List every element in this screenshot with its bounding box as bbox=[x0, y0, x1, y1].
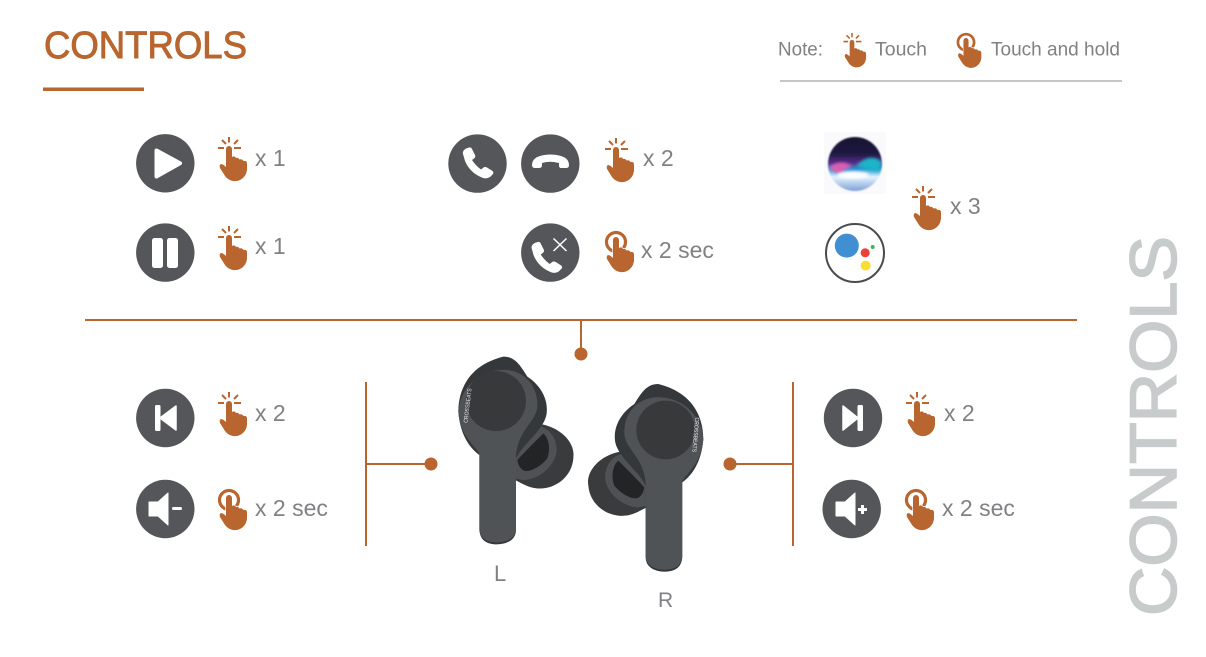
volume down row: x 2 sec bbox=[255, 495, 328, 521]
volume up row bbox=[822, 480, 1015, 538]
pause row bbox=[136, 223, 286, 282]
icon: previous track bbox=[136, 389, 194, 447]
icon: volume up bbox=[822, 480, 881, 538]
play row: x 1 bbox=[255, 145, 286, 171]
icon: touch bbox=[218, 226, 247, 270]
icon: pause bbox=[136, 223, 194, 282]
reject call row bbox=[521, 223, 714, 282]
icon: play bbox=[136, 134, 194, 192]
legend note bbox=[778, 33, 1122, 82]
icon: touch and hold bbox=[220, 490, 247, 530]
next track row bbox=[824, 389, 975, 447]
icon: next track bbox=[824, 389, 882, 447]
answer and end call row bbox=[448, 134, 674, 193]
next track row: x 2 bbox=[944, 400, 975, 426]
left earbud bbox=[458, 357, 574, 544]
icon: touch and hold legend bbox=[958, 34, 981, 68]
icon: touch bbox=[906, 392, 935, 436]
right earbud bbox=[588, 384, 703, 572]
label: left: L bbox=[494, 561, 506, 586]
volume down row bbox=[136, 480, 328, 538]
title: CONTROLS bbox=[44, 25, 247, 67]
icon: volume down bbox=[136, 480, 194, 538]
label: right: R bbox=[658, 589, 673, 612]
answer and end call row: x 2 bbox=[643, 145, 674, 171]
icon: siri bbox=[826, 136, 884, 192]
previous track row bbox=[136, 389, 286, 447]
previous track row: x 2 bbox=[255, 400, 286, 426]
legend note: Touch and hold bbox=[991, 38, 1120, 60]
reject call row: x 2 sec bbox=[641, 237, 714, 263]
icon: touch bbox=[605, 138, 634, 182]
icon: touch legend bbox=[843, 33, 866, 67]
legend note: Note: bbox=[778, 38, 823, 60]
icon: touch bbox=[218, 392, 247, 436]
icon: touch and hold bbox=[606, 232, 634, 272]
pause row: x 1 bbox=[255, 233, 286, 259]
voice assistants bbox=[824, 132, 981, 282]
vertical section label: CONTROLS bbox=[1116, 236, 1190, 616]
icon: touch bbox=[218, 137, 247, 181]
brand text: CROSSBEATS bbox=[463, 388, 474, 423]
voice assistants: x 3 bbox=[950, 193, 981, 219]
icon: touch bbox=[912, 186, 941, 230]
icon: google assistant bbox=[826, 224, 884, 282]
volume up row: x 2 sec bbox=[942, 495, 1015, 521]
title underline bbox=[43, 88, 144, 91]
play row bbox=[136, 134, 286, 192]
icon: reject call bbox=[521, 223, 580, 282]
icon: answer call bbox=[448, 134, 507, 193]
icon: touch and hold bbox=[906, 490, 934, 530]
brand text: CROSSBEATS bbox=[690, 417, 699, 452]
legend note: Touch bbox=[875, 38, 927, 60]
icon: end call bbox=[521, 134, 580, 193]
connector lines bbox=[85, 319, 1077, 546]
